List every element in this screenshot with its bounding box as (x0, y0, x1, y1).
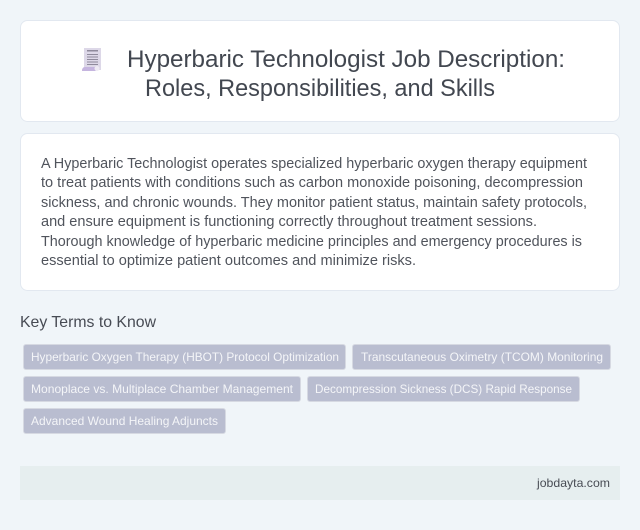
text block: description: A Hyperbaric Technologist operates specialized hyperbaric oxygen therapy equipment (41, 156, 587, 172)
title: Hyperbaric Technologist Job Description: (127, 46, 565, 73)
panel: description (20, 134, 620, 290)
tag: DCS: Decompression Sickness (DCS) Rapid Response (315, 382, 572, 396)
tag: wound healing: Advanced Wound Healing Adjuncts (31, 414, 218, 428)
panel: header (20, 20, 620, 122)
text block: description: essential to optimize patient outcomes and minimize risks. (41, 253, 416, 269)
text block: description (41, 156, 587, 269)
tag: TCOM: Transcutaneous Oximetry (TCOM) Monitoring (361, 350, 603, 364)
text block: description: and ensure equipment is functioning correctly throughout treatment sessions. (41, 214, 537, 230)
tag: DCS (308, 376, 580, 402)
tag: chamber management: Monoplace vs. Multiplace Chamber Management (31, 382, 294, 396)
tag: chamber management (24, 376, 300, 402)
tag: HBOT (24, 344, 346, 370)
footer (20, 466, 620, 500)
footer: jobdayta.com (536, 476, 610, 490)
tag: HBOT: Hyperbaric Oxygen Therapy (HBOT) Protocol Optimization (31, 350, 339, 364)
title (127, 46, 565, 102)
icon: document scroll (82, 48, 101, 71)
tag: wound healing (24, 408, 226, 434)
heading: key terms: Key Terms to Know (20, 314, 156, 331)
text block: description: sickness, and chronic wounds. They monitor patient status, maintain safety protocols, (41, 195, 587, 211)
text block: description: Thorough knowledge of hyperbaric medicine principles and emergency procedures is (41, 234, 582, 250)
title: Roles, Responsibilities, and Skills (145, 75, 495, 102)
text block: description: to treat patients with conditions such as carbon monoxide poisoning, decompression (41, 175, 583, 191)
tag: TCOM (352, 344, 610, 370)
tag list (24, 344, 610, 434)
